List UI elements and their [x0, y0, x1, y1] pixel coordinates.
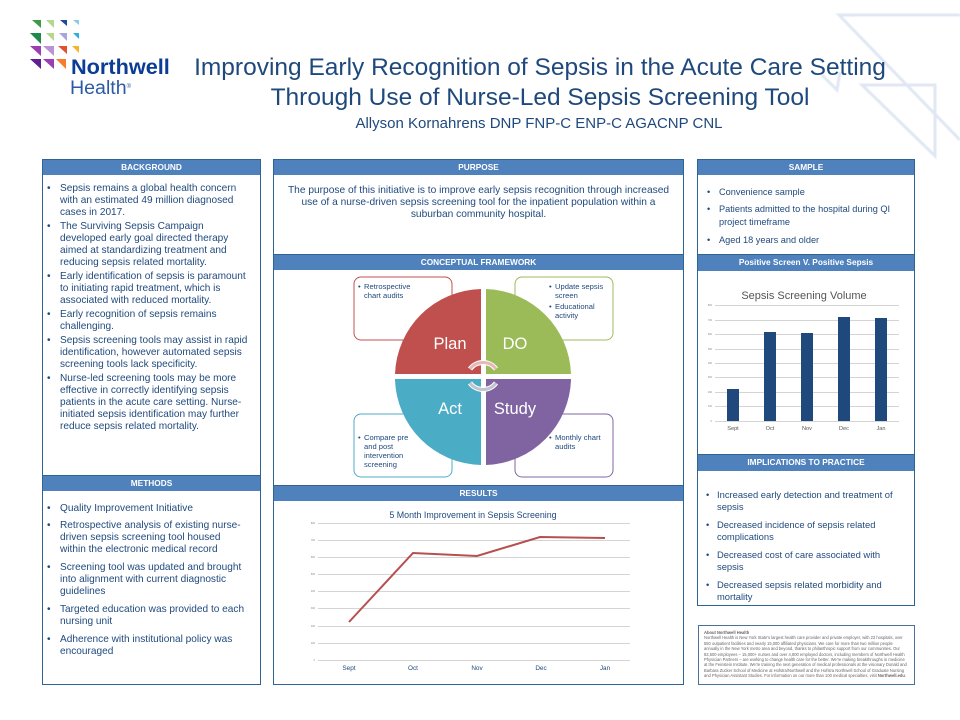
bar chart: 300	[708, 376, 713, 379]
chart title: 5 Month Improvement in Sepsis Screening	[389, 510, 557, 520]
line chart: 700	[311, 539, 316, 542]
callout: do: activity	[555, 311, 578, 320]
text: background bullets: The Surviving Sepsis Campaign developed early goal directed therapy aimed at standardizing treatment and reducing sepsis related mortality.	[60, 221, 228, 268]
panel: about: About Northwell Health	[704, 630, 749, 635]
heading: implications: IMPLICATIONS TO PRACTICE	[747, 457, 865, 467]
heading: sample	[698, 160, 914, 175]
act quadrant: Act	[438, 400, 462, 418]
bar chart: 0	[711, 420, 713, 423]
title: Through Use of Nurse-Led Sepsis Screening Tool	[271, 84, 809, 111]
callout: study	[515, 414, 613, 477]
axis labels: Dec	[535, 665, 547, 672]
line chart: 500	[311, 573, 316, 576]
callout: plan	[354, 277, 452, 340]
panel: background	[42, 159, 261, 476]
logo wordmark: Northwell	[71, 54, 170, 79]
heading: results	[274, 486, 683, 501]
callout: act: and post	[364, 442, 394, 451]
bar chart: 800	[708, 304, 713, 307]
line chart: 200	[311, 625, 316, 628]
axis labels: Oct	[766, 426, 775, 432]
callout: act: •	[358, 433, 361, 442]
line chart: 600	[311, 556, 316, 559]
axis labels: Sept	[727, 426, 739, 432]
bar chart: 500	[708, 348, 713, 351]
text: background bullets: Sepsis screening tools may assist in rapid identification, however automated sepsis screening tools lack specificity.	[60, 335, 247, 370]
panel: about	[698, 625, 915, 685]
heading: methods: METHODS	[131, 478, 172, 488]
text: implications bullets: Decreased incidence of sepsis related complications	[717, 519, 875, 542]
text: purpose: The purpose of this initiative is to improve early sepsis recognition through increased	[288, 184, 669, 196]
axis labels: Nov	[802, 426, 812, 432]
title	[194, 54, 886, 111]
heading: methods	[43, 476, 260, 491]
heading: implications	[698, 455, 914, 471]
logo	[30, 20, 170, 99]
callout: do	[515, 277, 613, 340]
callout: do: •	[549, 302, 552, 311]
chart title: Sepsis Screening Volume	[741, 290, 867, 302]
panel: sample	[697, 159, 915, 255]
bar chart: 600	[708, 333, 713, 336]
callout: plan: chart audits	[364, 291, 403, 300]
heading: purpose: PURPOSE	[458, 162, 499, 172]
heading: results: RESULTS	[459, 488, 498, 498]
plan quadrant: Plan	[433, 335, 467, 353]
line chart	[310, 510, 630, 672]
text: purpose: suburban community hospital.	[411, 209, 546, 220]
text: methods bullets: Retrospective analysis of existing nurse-	[60, 520, 241, 531]
callout: do: Educational	[555, 302, 595, 311]
authors: Allyson Kornahrens DNP FNP-C ENP-C AGACNP CNL	[355, 115, 723, 132]
line chart: 800	[311, 522, 316, 525]
callout: study: •	[549, 433, 552, 442]
axis labels: Dec	[839, 426, 849, 432]
text: purpose	[288, 184, 669, 220]
heading: positive screen: Positive Screen V. Positive Sepsis	[739, 257, 873, 267]
text: methods bullets: Targeted education was provided to each nursing unit	[60, 604, 244, 627]
text: background bullets: Early identification of sepsis is paramount to initiating rapid treatment, which is associated with reduced mortality.	[60, 271, 246, 306]
text: sample bullets: Aged 18 years and older	[719, 235, 819, 245]
callout: plan: Retrospective	[364, 282, 410, 291]
text: methods bullets: driven sepsis screening tool housed	[60, 532, 220, 543]
heading: sample: SAMPLE	[789, 162, 823, 172]
panel: purpose	[273, 159, 684, 255]
text: implications bullets: Increased early detection and treatment of sepsis	[717, 489, 893, 512]
text: implications bullets	[706, 489, 893, 602]
axis labels: Jan	[876, 426, 886, 432]
text: implications bullets: Decreased sepsis related morbidity and mortality	[717, 579, 882, 602]
bars	[727, 317, 887, 421]
heading: positive screen	[698, 255, 914, 271]
callout: act: Compare pre	[364, 433, 408, 442]
line chart: 300	[311, 607, 316, 610]
text: background bullets: Nurse-led screening tools may be more effective in correctly identifying sepsis patients in the acute care setting. Nurse-initiated sepsis identification may further reduce sepsis related mortality.	[60, 373, 241, 432]
axis labels: Nov	[471, 665, 483, 672]
axis labels: Sept	[342, 665, 356, 672]
logo subtext: Health®	[70, 77, 131, 99]
bar chart: 100	[708, 405, 713, 408]
line chart: 400	[311, 590, 316, 593]
study quadrant: Study	[494, 400, 537, 418]
line chart: 0	[314, 659, 316, 662]
callout: do: •	[549, 282, 552, 291]
heading: background	[43, 160, 260, 175]
axis labels: Jan	[600, 665, 611, 672]
text: methods bullets: within the electronic medical record	[60, 544, 218, 555]
bar chart: 200	[708, 391, 713, 394]
panel: positive screen	[697, 254, 915, 455]
callout: act: intervention	[364, 451, 403, 460]
line chart: 100	[311, 642, 316, 645]
panel: results	[273, 485, 684, 685]
text: background bullets: Sepsis remains a global health concern with an estimated 49 million diagnosed cases in 2017.	[60, 183, 236, 218]
panel: methods	[42, 475, 261, 685]
do quadrant	[486, 289, 571, 374]
axis labels: Oct	[408, 665, 418, 672]
bar chart: 400	[708, 362, 713, 365]
callout: do: Update sepsis	[555, 282, 603, 291]
bar chart: 700	[708, 319, 713, 322]
text: sample bullets: Convenience sample	[719, 187, 805, 197]
text: background bullets	[47, 183, 247, 432]
background watermark triangles	[821, 13, 960, 159]
heading: purpose	[274, 160, 683, 175]
bar chart	[708, 290, 899, 432]
callout: do: screen	[555, 291, 578, 300]
panel: conceptual framework	[273, 254, 684, 486]
line series	[349, 537, 605, 622]
act quadrant	[395, 379, 481, 465]
text: methods bullets	[47, 502, 244, 657]
panel: about: Northwell Health is New York State's largest health care provider and private employer, with 23 hospitals, over 550 outpatient facilities and nearly 15,000 affiliated physicians. We care for more than two million people annually in the New York metro area and beyond, thanks to philanthropic support from our communities. Our 83,500 employees – 15,000+ nurses and over 4,800 employed doctors, including members of Northwell Health Physician Partners – are working to change health care for the better. We're making breakthroughs in medicine at the Feinstein Institute. We're training the next generation of medical professionals at the visionary Donald and Barbara Zucker School of Medicine at Hofstra/Northwell and the Hofstra Northwell School of Graduate Nursing and Physician Assistant Studies. For information on our more than 100 medical specialties, visit Northwell.edu.	[704, 635, 907, 678]
callout: act	[354, 414, 452, 477]
heading: conceptual framework: CONCEPTUAL FRAMEWORK	[421, 257, 536, 267]
text: implications bullets: Decreased cost of care associated with sepsis	[717, 549, 880, 572]
study quadrant	[486, 379, 571, 465]
callout: study: audits	[555, 442, 575, 451]
text: methods bullets: Adherence with institutional policy was encouraged	[60, 634, 232, 657]
heading: conceptual framework	[274, 255, 683, 270]
text: sample bullets	[707, 187, 890, 245]
diagram: PDSA cycle	[354, 276, 614, 478]
text: purpose: use of a nurse-driven sepsis screening tool for the inpatient population within a	[302, 197, 655, 208]
text: sample bullets: Patients admitted to the hospital during QI project timeframe	[719, 204, 890, 227]
plan quadrant	[395, 289, 481, 374]
callout: plan: •	[358, 282, 361, 291]
text: methods bullets: Quality Improvement Initiative	[60, 502, 193, 514]
text: methods bullets: Screening tool was updated and brought into alignment with current diagnostic guidelines	[60, 562, 241, 597]
text: background bullets: Early recognition of sepsis remains challenging.	[60, 309, 217, 332]
callout: study: Monthly chart	[555, 433, 601, 442]
title: Improving Early Recognition of Sepsis in the Acute Care Setting	[194, 54, 886, 80]
do quadrant: DO	[503, 335, 528, 353]
icon: logo triangles	[30, 20, 79, 69]
axis labels	[342, 665, 611, 672]
icon: cycle arrows	[470, 362, 496, 390]
axis labels	[727, 426, 886, 432]
callout: act: screening	[364, 460, 397, 469]
panel: implications	[697, 454, 915, 606]
heading: background: BACKGROUND	[121, 162, 182, 172]
